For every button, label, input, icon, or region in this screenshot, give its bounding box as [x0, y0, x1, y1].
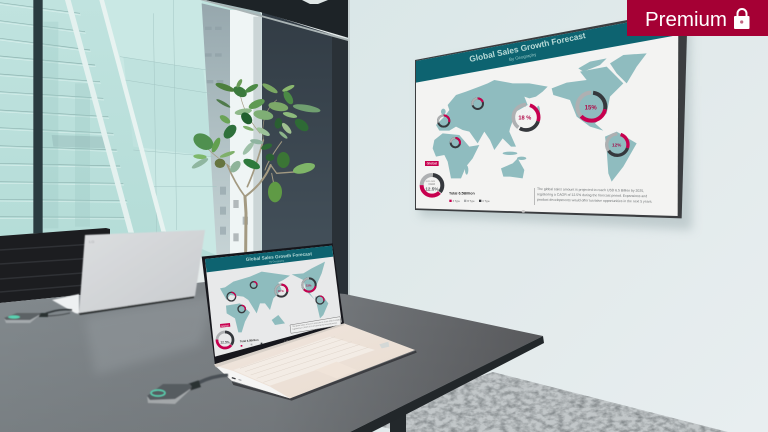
TV description text: The global sales amount is projected to reach USD 6.5 Billion by 2025, [537, 187, 644, 193]
laptop total and legend: Total 6.5Billion [240, 338, 259, 343]
TV donut: 12% [607, 134, 628, 155]
laptop total and legend [240, 338, 262, 347]
table top [0, 282, 544, 432]
TV title band [416, 13, 678, 83]
icon: lock [734, 9, 750, 29]
plant [190, 78, 321, 252]
TV donut: 18%: 18 % [518, 115, 531, 121]
laptop shadow [232, 351, 417, 401]
laptop donuts [227, 278, 324, 313]
laptop global donut: Global [221, 325, 229, 328]
window with building view [0, 0, 263, 257]
TV total and legend: B Type [467, 201, 475, 203]
badge: Premium: Premium [645, 8, 727, 31]
back laptop logo: LG [89, 239, 94, 244]
TV donut: 15%: 15% [585, 105, 597, 111]
TV global donut: 12.5%: Global [427, 162, 437, 166]
TV logo [522, 210, 525, 213]
TV donut: 18% [513, 105, 539, 130]
wall display: Global Sales Growth Forecast [415, 10, 688, 218]
carpet floor [350, 372, 728, 432]
laptop global donut: 12.5% [220, 340, 230, 344]
laptop global donut [217, 323, 233, 348]
laptop logo: LG [284, 339, 290, 344]
TV title band: Global Sales Growth Forecast [468, 30, 587, 64]
back laptop [52, 230, 205, 315]
TV total and legend: Total 6.5Billion [449, 192, 475, 196]
laptop lid and display: By Geography [269, 259, 285, 264]
badge: Premium [627, 0, 768, 36]
TV donut: 12%: 12% [612, 143, 622, 148]
TV donut: 15% [577, 93, 605, 121]
TV bezel [415, 10, 688, 218]
laptop description: registering a CAGR of 12.5% during the forecast period. [292, 321, 338, 331]
laptop base and keyboard [215, 323, 415, 398]
wireless dongle: back [4, 310, 72, 323]
TV global donut: 12.5%: 12.5% [425, 187, 439, 192]
chair [0, 228, 110, 303]
laptop description: The global sales amount is projected to reach USD 6.5 Billion, [292, 318, 342, 328]
laptop donuts: 18 % [278, 289, 284, 293]
TV title band: By Geography [509, 52, 538, 62]
TV global donut: 12.5% [422, 161, 442, 196]
laptop donuts: 15% [306, 283, 312, 287]
TV total and legend [449, 192, 490, 203]
front laptop [202, 243, 417, 401]
dark wall column and ceiling [200, 0, 350, 300]
TV total and legend: C Type [482, 201, 490, 203]
wireless dongle: front [147, 375, 228, 404]
TV description text: registering a CAGR of 12.5% during the forecast period. Expansions and [537, 192, 647, 198]
TV total and legend: X Type [453, 201, 461, 203]
laptop lid and display: Global Sales Growth Forecast [246, 251, 313, 262]
TV description text [534, 187, 652, 205]
TV global donut: 12.5%: CAGR [428, 183, 435, 186]
laptop lid and display [202, 243, 344, 366]
wall [345, 0, 768, 432]
TV small donuts: regions [438, 98, 483, 147]
TV global donut: 12.5%: 2021-2025 [426, 181, 436, 183]
TV shadow [420, 18, 692, 230]
laptop world map [220, 262, 328, 332]
TV world map [433, 53, 647, 182]
TV description text: product developments would offer lucrative opportunities in the next 5 years. [537, 198, 652, 204]
laptop description [290, 317, 342, 333]
table leg [390, 412, 406, 432]
